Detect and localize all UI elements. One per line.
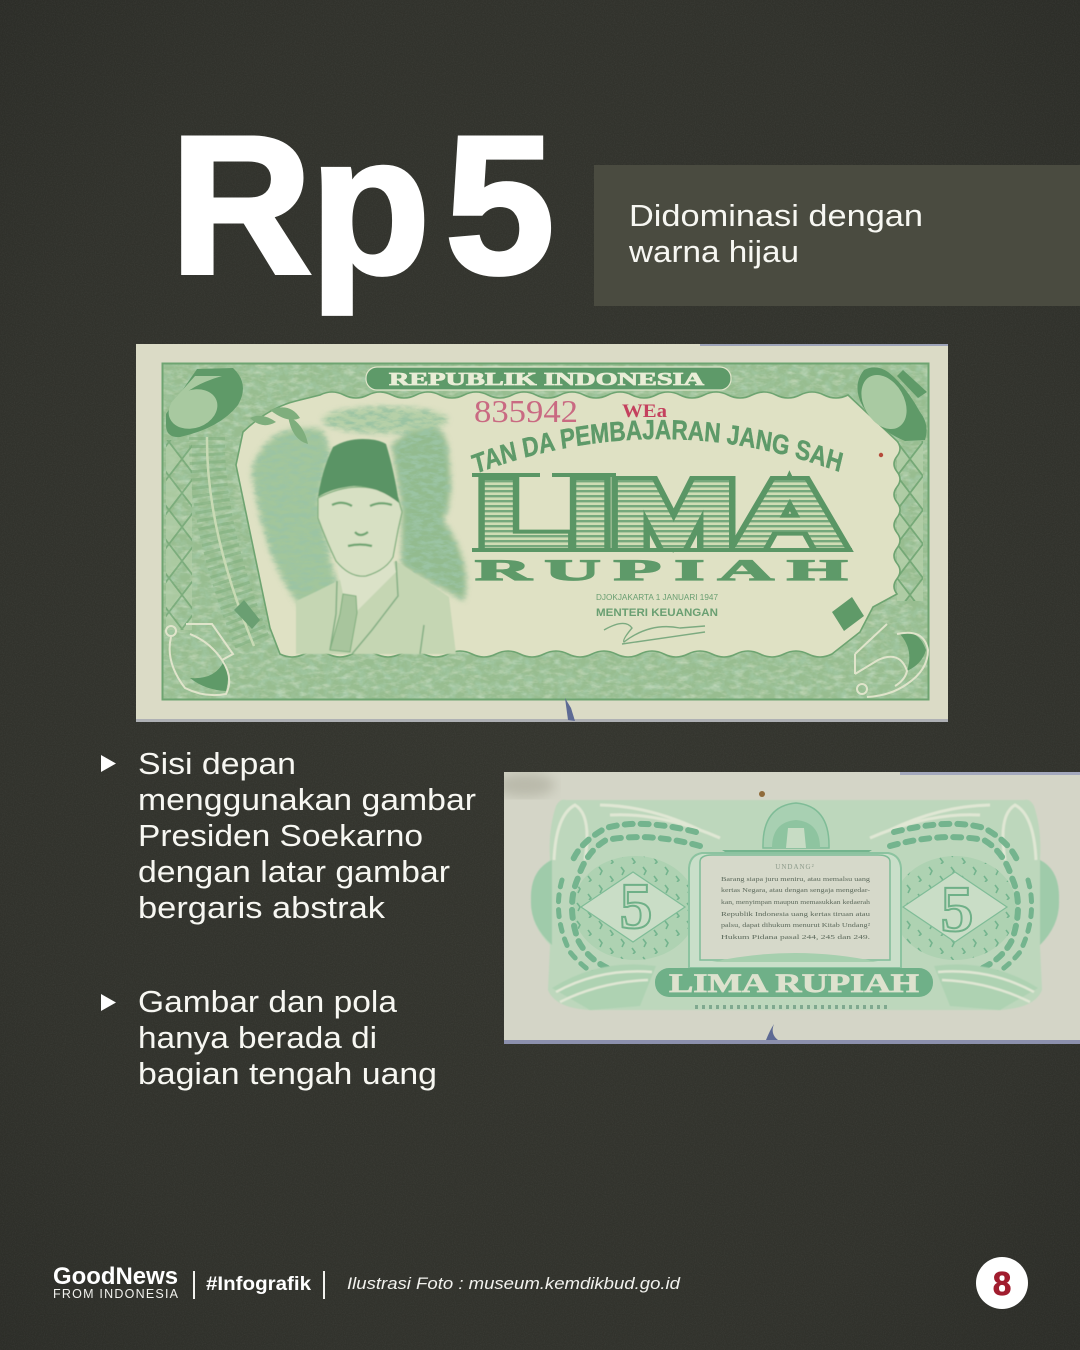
scrolling ribbons bbox=[554, 805, 1036, 860]
note centre field bbox=[236, 392, 900, 657]
facial features bbox=[332, 503, 392, 546]
leaves near top of portrait bbox=[250, 407, 308, 444]
neck and shirt bbox=[336, 556, 396, 612]
corner 5 bottom right bbox=[855, 624, 928, 697]
callout text: Didominasi dengan bbox=[629, 198, 923, 233]
bullet text 1 bbox=[138, 746, 476, 925]
law text box: kan, menyimpan maupun memasukkan kedaerah bbox=[721, 899, 871, 906]
banner: Lima Rupiah bbox=[655, 968, 933, 998]
text: LIMA: LIMA bbox=[478, 462, 844, 566]
text: RUPIAH: RUPIAH bbox=[475, 553, 861, 587]
portrait: Soekarno bbox=[296, 439, 456, 654]
law text box: kertas Negara, atau dengan sengaja mengedar- bbox=[721, 887, 870, 894]
side lobes bbox=[531, 860, 1059, 945]
footer bbox=[53, 1257, 1028, 1309]
divider right bbox=[323, 1271, 325, 1299]
law text box bbox=[689, 853, 901, 968]
face bbox=[318, 487, 402, 576]
right diamond with 5: 5 bbox=[940, 873, 974, 946]
bullet marker 2 bbox=[101, 994, 116, 1011]
law text box: Hukum Pidana pasal 244, 245 dan 249. bbox=[721, 934, 871, 941]
text: LIMA: LIMA bbox=[478, 462, 844, 566]
law text box: Republik Indonesia uang kertas tiruan atau bbox=[721, 911, 871, 918]
dotted oval right bbox=[893, 856, 1017, 960]
serial number: 835942 bbox=[474, 393, 578, 429]
emblem bbox=[722, 803, 872, 854]
bullet 2 bbox=[101, 984, 437, 1091]
bullet text 2 bbox=[138, 984, 437, 1091]
scroll bottom right bbox=[832, 597, 864, 631]
banner: Republik Indonesia: REPUBLIK INDONESIA bbox=[389, 369, 704, 389]
page number: 8 bbox=[993, 1265, 1011, 1302]
note frame bbox=[162, 363, 929, 700]
peci hat bbox=[318, 439, 399, 503]
red speck bbox=[879, 453, 883, 457]
issue date: DJOKJAKARTA 1 JANUARI 1947 bbox=[596, 593, 719, 602]
bullet text 2: Gambar dan pola bbox=[138, 984, 398, 1019]
bullet list bbox=[101, 746, 476, 1091]
portrait foliage bbox=[252, 407, 466, 606]
law text box: UNDANG² bbox=[775, 863, 815, 871]
bullet text 1: Presiden Soekarno bbox=[138, 818, 423, 853]
banner: Republik Indonesia bbox=[366, 367, 731, 390]
series code: WEa bbox=[622, 401, 668, 422]
left rice wreath bbox=[558, 824, 700, 982]
corner 5 top right bbox=[852, 367, 927, 441]
hashtag: #Infografik bbox=[206, 1274, 311, 1295]
paper tear bbox=[766, 1024, 778, 1040]
bullet text 1: menggunakan gambar bbox=[138, 782, 476, 817]
banknote front: Rp5 bbox=[136, 344, 948, 722]
left border lattice bbox=[166, 440, 192, 630]
law text box: palsu, dapat dihukum menurut Kitab Undang² bbox=[721, 922, 870, 929]
callout panel: dominant colour bbox=[594, 165, 1080, 306]
suit bbox=[296, 561, 456, 654]
divider left bbox=[193, 1271, 195, 1299]
bullet text 2: bagian tengah uang bbox=[138, 1056, 437, 1091]
right diamond with 5 bbox=[903, 872, 1007, 946]
right border lattice bbox=[897, 441, 923, 601]
bullet text 1: Sisi depan bbox=[138, 746, 296, 781]
scalloped underline bbox=[695, 1005, 890, 1009]
text: LIMA bbox=[472, 462, 852, 566]
left laurel bbox=[207, 437, 254, 646]
callout text bbox=[628, 198, 923, 269]
callout text: warna hijau bbox=[628, 234, 799, 269]
ornament base bbox=[531, 800, 1059, 1010]
bullet text 1: bergaris abstrak bbox=[138, 890, 386, 925]
corner 5 top left bbox=[163, 368, 243, 437]
banner: Lima Rupiah: LIMA RUPIAH bbox=[669, 969, 919, 998]
arc text: TAN DA PEMBAJARAN JANG SAH bbox=[470, 420, 844, 472]
left diamond with 5 bbox=[581, 870, 685, 943]
right rice wreath bbox=[890, 824, 1032, 982]
scroll bottom left bbox=[234, 600, 260, 629]
page number bbox=[976, 1257, 1028, 1309]
tie bbox=[330, 594, 357, 652]
bullet text 1: dengan latar gambar bbox=[138, 854, 450, 889]
hills under text box bbox=[712, 953, 878, 962]
title: Rp5: Rp5 bbox=[170, 95, 555, 315]
left diamond with 5: 5 bbox=[620, 870, 652, 943]
photo credit: Ilustrasi Foto : museum.kemdikbud.go.id bbox=[347, 1274, 681, 1293]
ribbon tails bbox=[552, 964, 1038, 1010]
dot pattern left bbox=[576, 856, 688, 960]
bullet text 2: hanya berada di bbox=[138, 1020, 377, 1055]
logo: GoodNews from Indonesia: GoodNews bbox=[53, 1263, 178, 1290]
dotted oval left bbox=[573, 856, 697, 960]
dot pattern right bbox=[906, 856, 1010, 960]
corner 5 bottom left bbox=[166, 624, 233, 695]
logo: GoodNews from Indonesia: FROM INDONESIA bbox=[53, 1287, 179, 1301]
bullet 1 bbox=[101, 746, 476, 925]
paper tear bbox=[565, 698, 575, 721]
lapels and jacket lines bbox=[330, 561, 424, 654]
bullet marker 1 bbox=[101, 755, 116, 772]
minister title: MENTERI KEUANGAN bbox=[596, 607, 718, 619]
signature bbox=[604, 623, 705, 644]
law text box: Barang siapa juru meniru, atau memalsu uang bbox=[721, 876, 871, 883]
brown speck bbox=[759, 791, 765, 797]
banknote back: Rp5 bbox=[495, 772, 1080, 1044]
